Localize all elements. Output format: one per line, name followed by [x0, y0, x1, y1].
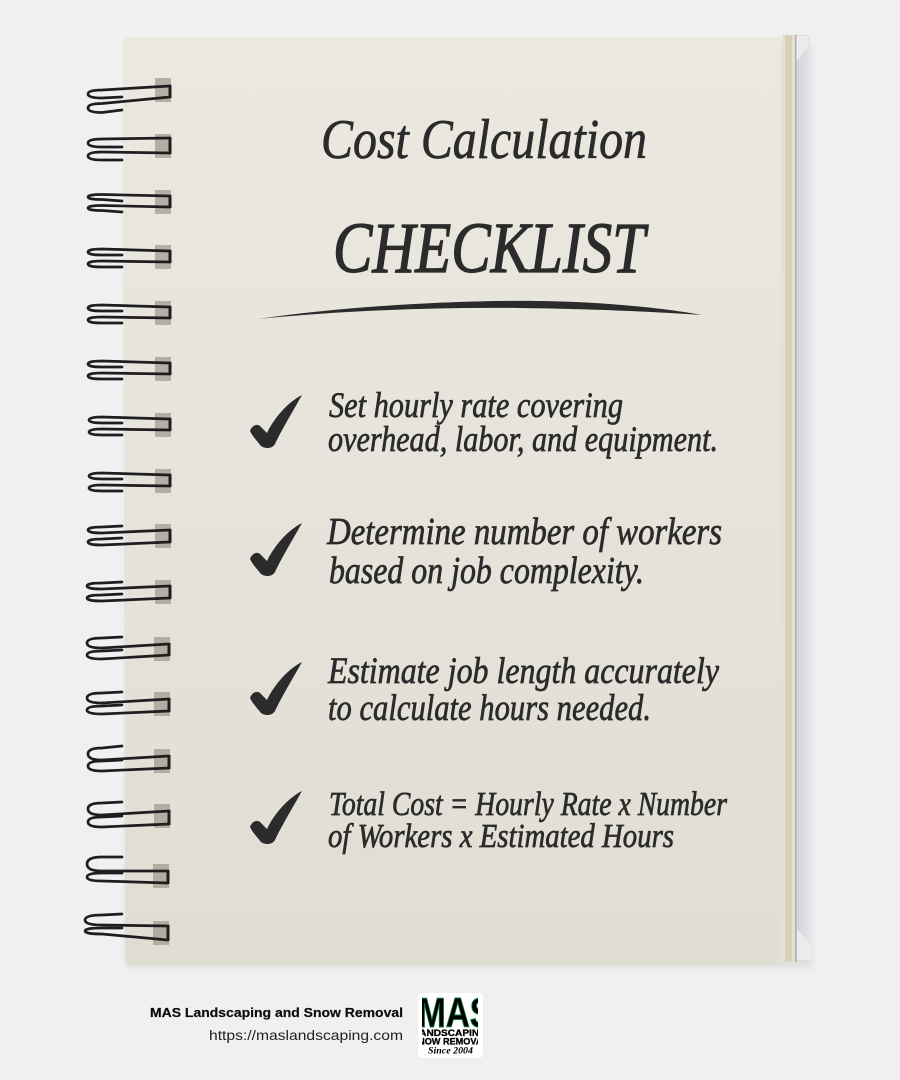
icon: check mark: [250, 395, 302, 448]
coil 4: [88, 245, 171, 269]
coil 12: [87, 692, 170, 716]
coil 6: [88, 357, 171, 381]
icon: check mark: [250, 791, 302, 844]
back cover corner pockets: [795, 36, 812, 960]
item 2 text: Determine number of workers: [326, 511, 722, 553]
checklist item 1: [250, 385, 718, 459]
item 1 text: Set hourly rate covering: [329, 385, 623, 425]
notebook: [123, 35, 812, 968]
item 2 text: based on job complexity.: [329, 550, 644, 592]
item 1 text: [328, 385, 718, 459]
icon: check mark: [250, 662, 302, 715]
coil 3: [88, 190, 171, 214]
checklist item 2: [250, 511, 722, 592]
logo: [418, 993, 483, 1058]
coil 13: [88, 746, 170, 773]
coil 1: [88, 78, 171, 112]
item 2 text: [326, 511, 722, 592]
logo letters MAS: MAS: [418, 989, 492, 1036]
coil 7: [89, 413, 171, 437]
item 1 text: overhead, labor, and equipment.: [328, 419, 718, 459]
item 3 text: to calculate hours needed.: [328, 688, 651, 729]
coil 5: [88, 301, 171, 325]
coil 11: [87, 637, 170, 661]
item 3 text: Estimate job length accurately: [327, 651, 719, 692]
coil 14: [88, 802, 170, 828]
title: Cost Calculation: Cost Calculation: [321, 109, 647, 171]
coil 16: [85, 914, 169, 945]
item 3 text: [327, 651, 719, 729]
item 4 text: of Workers x Estimated Hours: [328, 818, 674, 855]
logo line 1: LANDSCAPING: [413, 1028, 487, 1039]
page: [123, 37, 781, 965]
coil 8: [89, 469, 171, 493]
item 4 text: Total Cost = Hourly Rate x Number: [329, 786, 728, 823]
footer url: https://maslandscaping.com: [209, 1028, 403, 1043]
coil 10: [87, 580, 171, 604]
logo tagline: Since 2004: [428, 1046, 474, 1056]
white back cover: [795, 35, 812, 961]
logo line 2: SNOW REMOVAL: [412, 1036, 488, 1048]
heading underline: [258, 301, 702, 319]
heading: CHECKLIST: CHECKLIST: [333, 208, 649, 288]
icon: check mark: [250, 523, 302, 576]
coil 9: [88, 524, 171, 548]
checklist item 4: [250, 786, 728, 855]
coil 15: [87, 857, 169, 888]
footer company name: MAS Landscaping and Snow Removal: [150, 1005, 403, 1020]
stacked page edges: [782, 35, 796, 962]
coil 2: [88, 134, 171, 160]
item 4 text: [328, 786, 728, 855]
spiral binding: [85, 78, 171, 945]
checklist item 3: [250, 651, 719, 729]
